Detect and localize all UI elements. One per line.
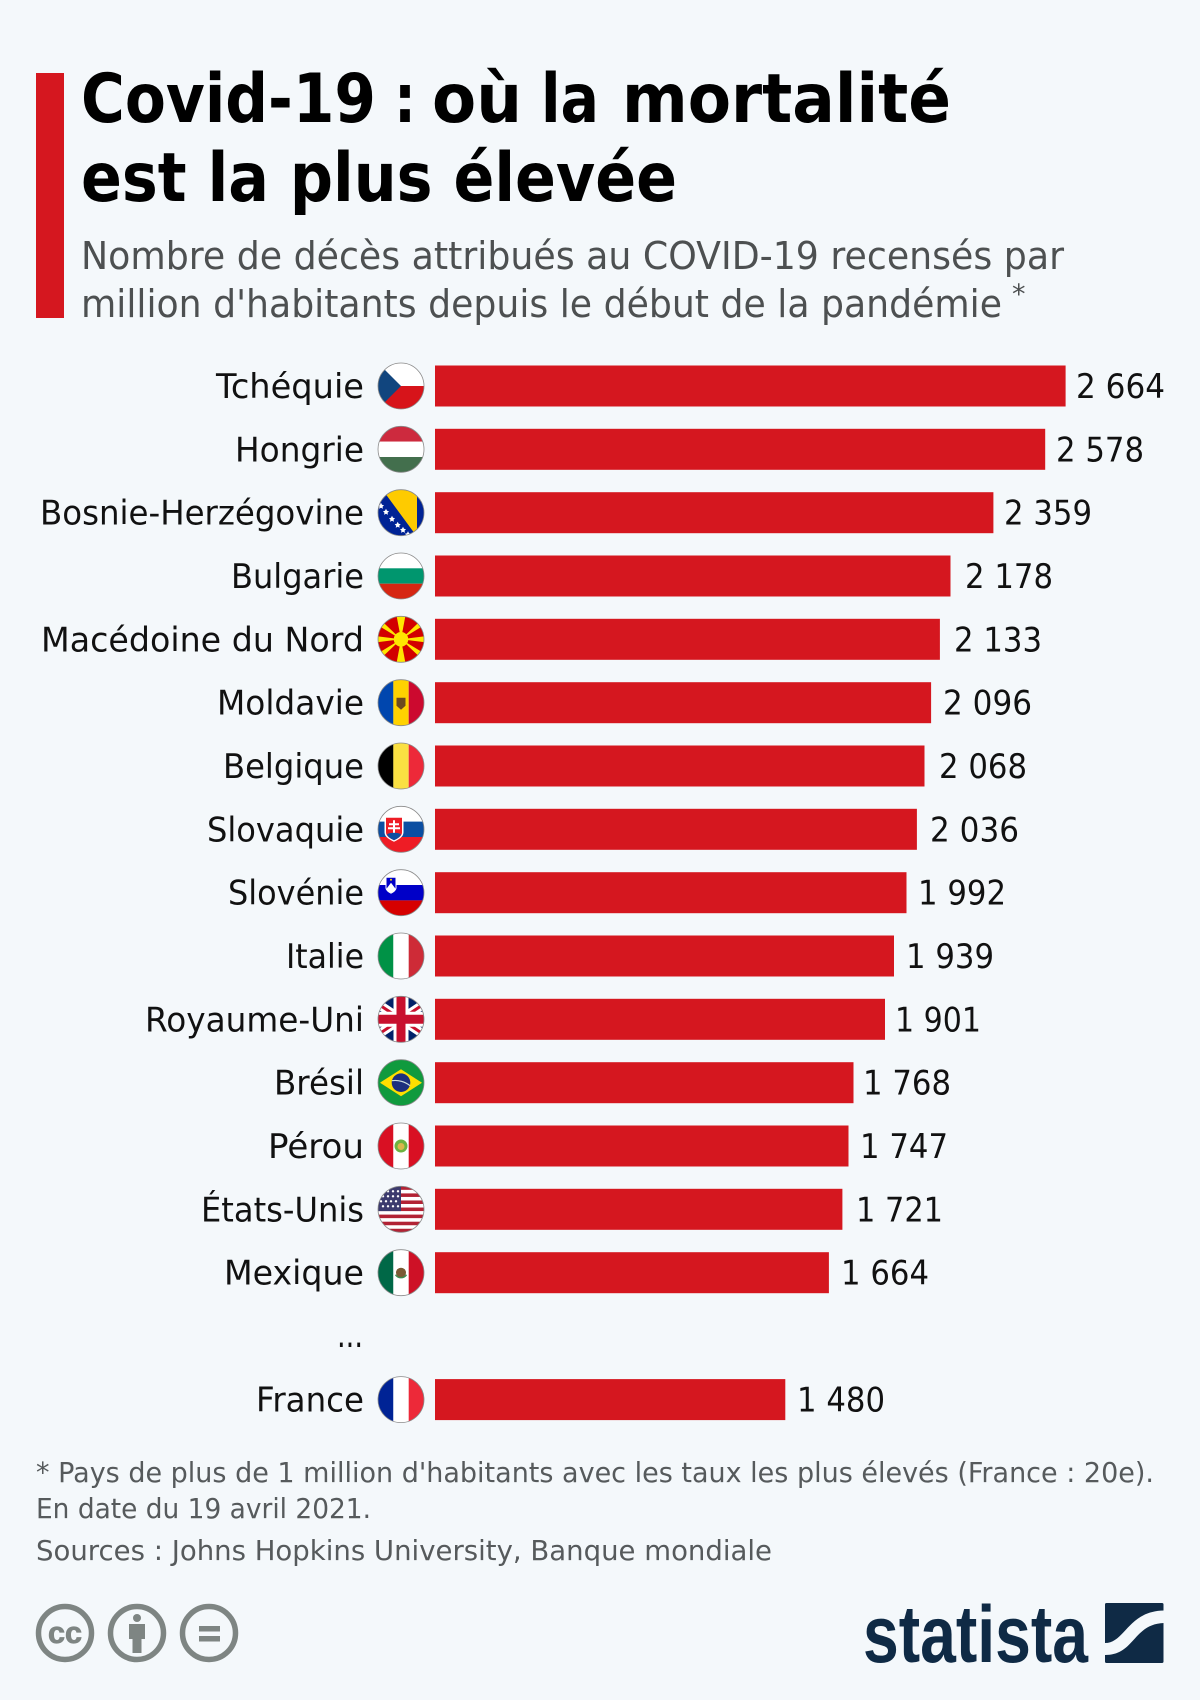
- row: Slovénie: [228, 870, 1006, 916]
- statista logo: statista: [863, 1590, 1089, 1680]
- row: Hongrie: [235, 426, 1144, 472]
- label: Mexique: [224, 1254, 364, 1293]
- bar: [435, 999, 885, 1040]
- title: [81, 60, 951, 218]
- bar: [435, 936, 894, 976]
- icon: flag Slovenia: [378, 870, 424, 916]
- title: Covid-19: [81, 60, 376, 139]
- value: 1 939: [906, 937, 994, 976]
- bar: [435, 746, 924, 786]
- label: Pérou: [268, 1127, 364, 1166]
- icon: flag Belgium: [378, 743, 424, 789]
- bar: [435, 556, 950, 596]
- value: 1 768: [863, 1064, 951, 1103]
- row: Belgique: [223, 743, 1027, 789]
- bar chart: [40, 363, 1165, 1423]
- icon: flag United States: [378, 1186, 424, 1232]
- row: États-Unis: [201, 1186, 943, 1232]
- row: Macédoine du Nord: [41, 615, 1042, 663]
- label: Hongrie: [235, 430, 364, 469]
- row: Bosnie-Herzégovine: [40, 488, 1092, 537]
- row: Slovaquie: [207, 806, 1019, 852]
- label: Moldavie: [217, 684, 364, 723]
- value: 2 178: [965, 557, 1053, 596]
- footnote: * Pays de plus de 1 million d'habitants avec les taux les plus élevés (France : 20e).: [36, 1456, 1154, 1489]
- row: Mexique: [224, 1250, 929, 1296]
- bar: [435, 366, 1066, 406]
- bar: [435, 1062, 854, 1103]
- value: 1 901: [895, 1000, 981, 1039]
- label: Italie: [286, 937, 364, 976]
- bar: [435, 872, 906, 913]
- label: États-Unis: [201, 1189, 364, 1229]
- icon: flag Bosnia: [378, 488, 424, 537]
- row: Moldavie: [217, 680, 1032, 726]
- value: 2 096: [943, 684, 1032, 723]
- bar: [435, 809, 917, 850]
- icon: flag Italy: [378, 933, 424, 979]
- label: Bulgarie: [231, 557, 364, 596]
- icon: flag Moldova: [378, 680, 424, 726]
- bar: [435, 429, 1045, 470]
- label: Slovénie: [228, 874, 364, 913]
- bar: [435, 1126, 848, 1166]
- label: Brésil: [274, 1064, 364, 1103]
- icon: flag United Kingdom: [377, 995, 425, 1043]
- icon: flag Brazil: [378, 1060, 424, 1106]
- value: 1 480: [797, 1381, 885, 1420]
- value: 2 578: [1056, 430, 1144, 469]
- row: Brésil: [274, 1060, 951, 1106]
- row: France: [256, 1377, 885, 1423]
- icon: flag North Macedonia: [377, 615, 425, 663]
- title: la: [541, 60, 599, 139]
- ellipsis: ...: [337, 1315, 363, 1356]
- icon: flag Peru: [378, 1123, 424, 1169]
- value: 2 359: [1004, 494, 1092, 533]
- value: 2 036: [930, 810, 1019, 849]
- sources: Sources : Johns Hopkins University, Banque mondiale: [36, 1534, 772, 1567]
- icon: flag Bulgaria: [378, 553, 424, 599]
- label: Slovaquie: [207, 810, 364, 849]
- accent bar: [36, 73, 64, 318]
- title: où: [432, 60, 522, 139]
- label: Tchéquie: [215, 367, 364, 406]
- subtitle: *: [1012, 279, 1026, 310]
- row: Royaume-Uni: [145, 995, 981, 1043]
- icon: flag Hungary: [378, 426, 424, 472]
- value: 2 664: [1076, 367, 1165, 406]
- subtitle: million d'habitants depuis le début de la pandémie: [81, 282, 1002, 326]
- value: 2 068: [939, 747, 1027, 786]
- row: Tchéquie: [215, 363, 1165, 409]
- icon: creative commons: [38, 1606, 236, 1660]
- label: Belgique: [223, 747, 364, 786]
- icon: flag Czechia: [378, 363, 424, 409]
- label: Macédoine du Nord: [41, 620, 364, 659]
- label: Bosnie-Herzégovine: [40, 494, 364, 533]
- value: 1 721: [856, 1190, 943, 1229]
- row: Pérou: [268, 1123, 948, 1169]
- icon: flag Mexico: [378, 1250, 424, 1296]
- bar: [435, 1189, 842, 1230]
- icon: creative commons: cc: [48, 1615, 82, 1650]
- footnote: En date du 19 avril 2021.: [36, 1492, 371, 1525]
- label: Royaume-Uni: [145, 1000, 364, 1039]
- title: mortalité: [622, 60, 951, 139]
- bar: [435, 492, 993, 533]
- row: Italie: [286, 933, 994, 979]
- bar: [435, 1379, 785, 1420]
- footnote: [36, 1456, 1154, 1525]
- value: 1 664: [841, 1254, 929, 1293]
- bar: [435, 682, 931, 723]
- subtitle: [81, 234, 1064, 326]
- value: 1 992: [918, 874, 1006, 913]
- subtitle: Nombre de décès attribués au COVID-19 recensés par: [81, 234, 1064, 278]
- bar: [435, 1252, 829, 1293]
- title: est la plus élevée: [81, 139, 677, 218]
- title: :: [394, 60, 416, 139]
- icon: flag France: [378, 1377, 424, 1423]
- row: Bulgarie: [231, 553, 1053, 599]
- bar: [435, 619, 940, 660]
- value: 1 747: [860, 1127, 948, 1166]
- label: France: [256, 1381, 364, 1420]
- value: 2 133: [954, 620, 1042, 659]
- icon: flag Slovakia: [378, 806, 424, 852]
